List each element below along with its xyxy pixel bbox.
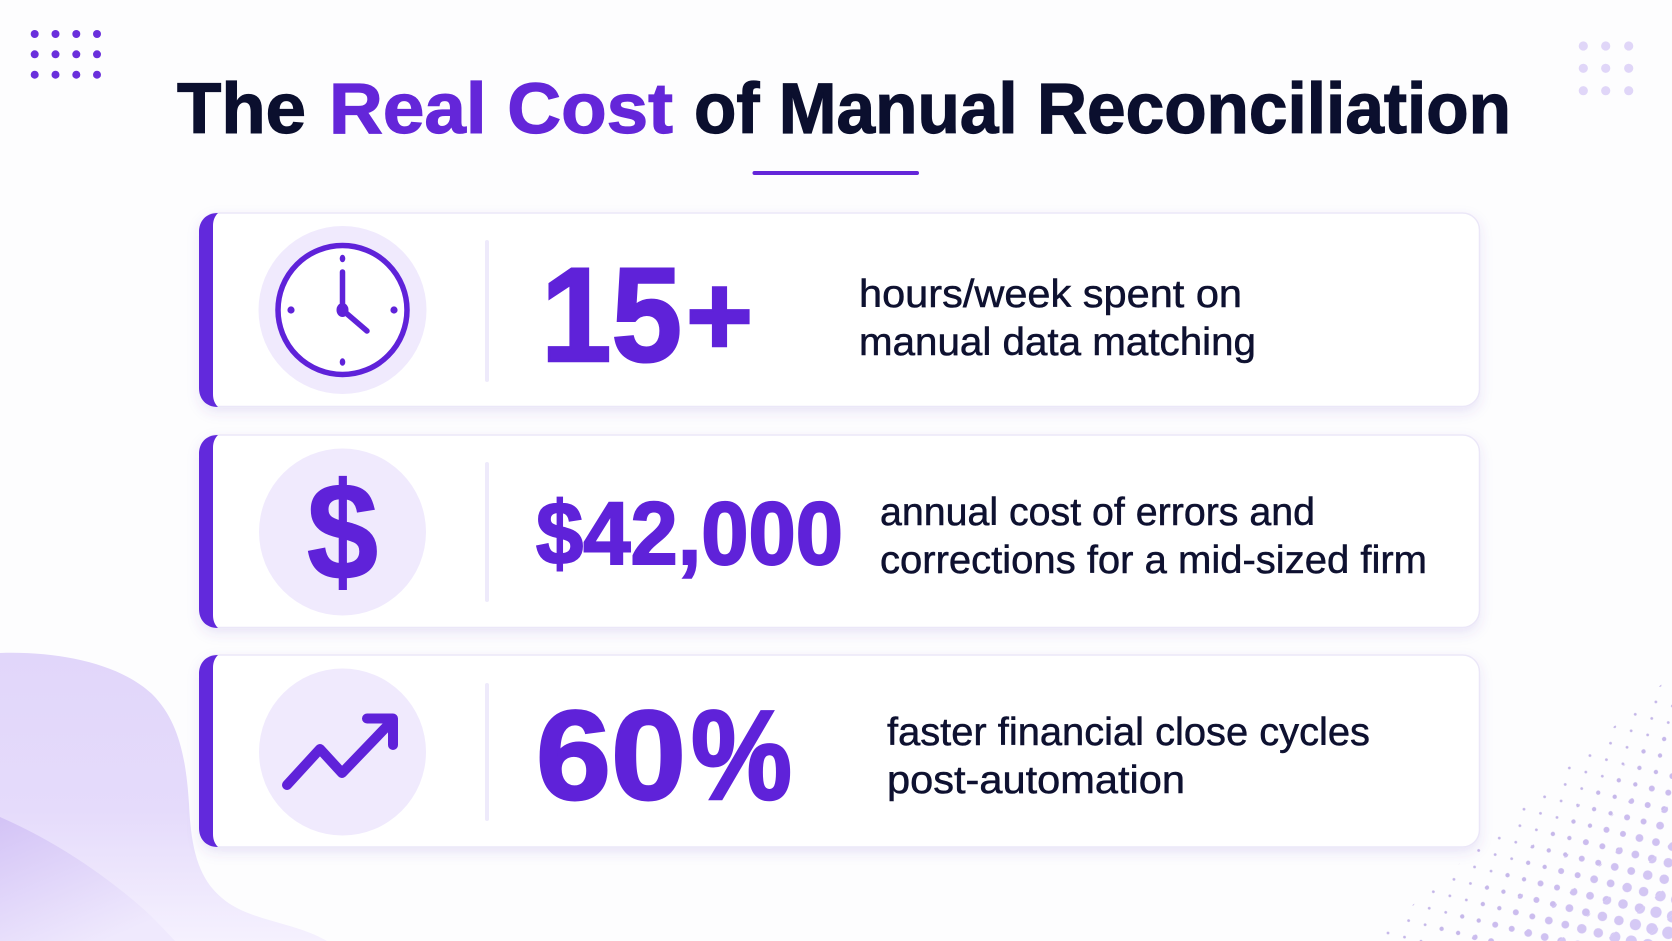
icon: dollar sign xyxy=(259,448,426,616)
title: of Manual Reconciliation xyxy=(694,70,1511,149)
card accent bar xyxy=(199,435,218,628)
card accent bar xyxy=(199,655,218,847)
description: faster financial close cycles xyxy=(887,711,1370,754)
panel: hours per week xyxy=(199,213,1480,407)
panel: faster close xyxy=(199,655,1480,847)
stat: 15+: + xyxy=(686,252,753,380)
stat: 60%: % xyxy=(691,684,792,826)
icon: dollar sign: $ xyxy=(307,455,378,609)
card accent bar xyxy=(199,213,218,407)
title underline xyxy=(752,171,919,175)
icon: clock xyxy=(258,226,426,394)
description: annual cost of errors and xyxy=(880,491,1315,534)
description xyxy=(887,711,1370,802)
divider xyxy=(485,240,489,382)
title: The xyxy=(177,70,306,149)
decorative dot grid: top right xyxy=(1579,41,1633,95)
divider xyxy=(485,462,489,602)
title xyxy=(177,70,1511,149)
description: hours/week spent on xyxy=(859,273,1242,316)
decorative halftone dots: bottom right xyxy=(1372,675,1672,941)
icon: rising trend arrow xyxy=(259,668,426,836)
stat: 15+: 15 xyxy=(541,241,682,390)
card background xyxy=(200,435,1480,628)
decorative blob: bottom left xyxy=(0,653,327,941)
description xyxy=(880,491,1427,582)
divider xyxy=(485,683,489,821)
card background xyxy=(200,655,1480,847)
stat: 60%: 60 xyxy=(536,684,686,826)
description xyxy=(859,273,1256,364)
panel: annual cost xyxy=(199,435,1480,628)
card background xyxy=(200,213,1480,406)
stat: $42,000: $42,000 xyxy=(536,483,843,583)
decorative dot grid: top left xyxy=(31,30,101,79)
description: manual data matching xyxy=(859,321,1256,364)
title: Real Cost xyxy=(329,70,673,149)
description: post-automation xyxy=(887,759,1185,802)
description: corrections for a mid-sized firm xyxy=(880,539,1427,582)
